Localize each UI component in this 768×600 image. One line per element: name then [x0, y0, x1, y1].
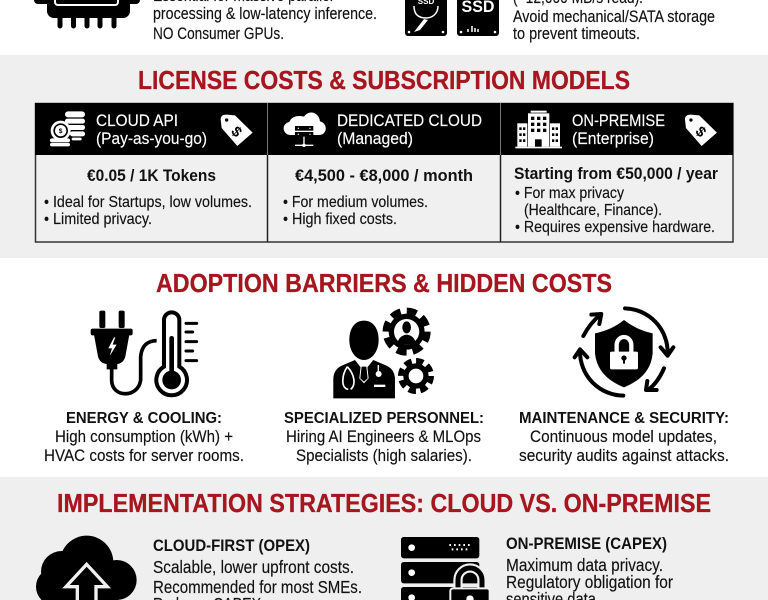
label: DEDICATED CLOUD	[337, 111, 482, 130]
text: GPU description: NO Consumer GPUs.	[153, 25, 284, 43]
bullets	[515, 185, 715, 236]
text: Maximum data privacy.	[506, 555, 663, 575]
icon: server with lock	[401, 537, 490, 600]
label	[572, 111, 665, 148]
icon: coins: $	[59, 128, 63, 135]
text: Specialists (high salaries).	[296, 447, 472, 465]
column: cloud API	[44, 111, 253, 228]
panel: specialized personnel	[284, 311, 484, 465]
text: MAINTENANCE & SECURITY:	[519, 410, 729, 427]
panel: maintenance and security	[519, 308, 729, 465]
text: Scalable, lower upfront costs.	[153, 557, 354, 577]
panel: hardware requirements (cropped top)	[34, 0, 715, 43]
bullets: • For medium volumes.	[283, 194, 428, 211]
icon: plug and thermometer	[91, 311, 197, 395]
text: CLOUD-FIRST (OPEX)	[153, 536, 310, 555]
text: HVAC costs for server rooms.	[44, 447, 244, 465]
bullets: • For max privacy	[515, 185, 624, 202]
label: ON-PREMISE	[572, 111, 665, 130]
icon: cloud upload	[36, 536, 137, 600]
icon: SSD drives	[405, 0, 499, 36]
bullets: • High fixed costs.	[283, 211, 397, 228]
icon: GPU chip	[34, 0, 140, 26]
column: on-premise	[514, 111, 718, 236]
text	[519, 410, 729, 465]
icon: doctor with gears	[333, 311, 431, 398]
heading: implementation strategies: IMPLEMENTATION STRATEGIES: CLOUD VS. ON-PREMISE	[57, 488, 711, 518]
icon: cloud server	[284, 113, 326, 147]
panel: cloud-first	[36, 536, 362, 600]
bullets: • Ideal for Startups, low volumes.	[44, 194, 252, 211]
icon: shield with lock and arrows	[575, 308, 673, 396]
bullets	[283, 194, 428, 228]
price: Starting from €50,000 / year	[514, 164, 718, 183]
label	[96, 111, 207, 148]
text: security audits against attacks.	[519, 447, 729, 465]
label: (Managed)	[337, 129, 413, 148]
column: dedicated cloud	[283, 111, 482, 228]
text: ENERGY & COOLING:	[66, 410, 222, 427]
table: license models	[35, 103, 733, 242]
text	[44, 410, 244, 465]
text	[284, 410, 484, 465]
text: Continuous model updates,	[530, 428, 717, 446]
text	[506, 534, 673, 600]
heading: license costs: LICENSE COSTS & SUBSCRIPTION MODELS	[138, 65, 630, 95]
label: CLOUD API	[96, 111, 178, 130]
icon: price tag	[221, 115, 253, 146]
text: GPU description: processing & low-latency inference.	[153, 5, 377, 23]
price: €0.05 / 1K Tokens	[87, 166, 216, 185]
text: storage description: Avoid mechanical/SATA storage	[513, 8, 715, 26]
icon: price tag: $	[692, 124, 709, 141]
text: storage description: to prevent timeouts.	[513, 25, 640, 43]
bullets: • Limited privacy.	[44, 211, 152, 228]
bullets	[44, 194, 252, 228]
label: (Enterprise)	[572, 129, 654, 148]
icon: coins	[50, 111, 85, 146]
text: ON-PREMISE (CAPEX)	[506, 534, 667, 553]
icon: price tag	[685, 115, 717, 146]
label: (Pay-as-you-go)	[96, 129, 207, 148]
icon: office building	[515, 111, 562, 148]
bullets: (Healthcare, Finance).	[524, 202, 662, 219]
text: High consumption (kWh) +	[55, 428, 233, 446]
icon: price tag: $	[227, 124, 244, 141]
panel: energy and cooling	[44, 311, 244, 465]
text: SPECIALIZED PERSONNEL:	[284, 410, 484, 427]
text: storage description	[513, 0, 715, 43]
bullets: • Requires expensive hardware.	[515, 219, 715, 236]
text: GPU description	[153, 0, 377, 43]
panel: on-premise capex	[401, 534, 673, 600]
text: Regulatory obligation for	[506, 572, 673, 592]
heading: adoption barriers: ADOPTION BARRIERS & HIDDEN COSTS	[156, 268, 612, 298]
text: Recommended for most SMEs.	[153, 577, 362, 597]
label	[337, 111, 482, 148]
text	[153, 536, 362, 600]
price: €4,500 - €8,000 / month	[295, 166, 473, 185]
text: Hiring AI Engineers & MLOps	[286, 428, 481, 446]
